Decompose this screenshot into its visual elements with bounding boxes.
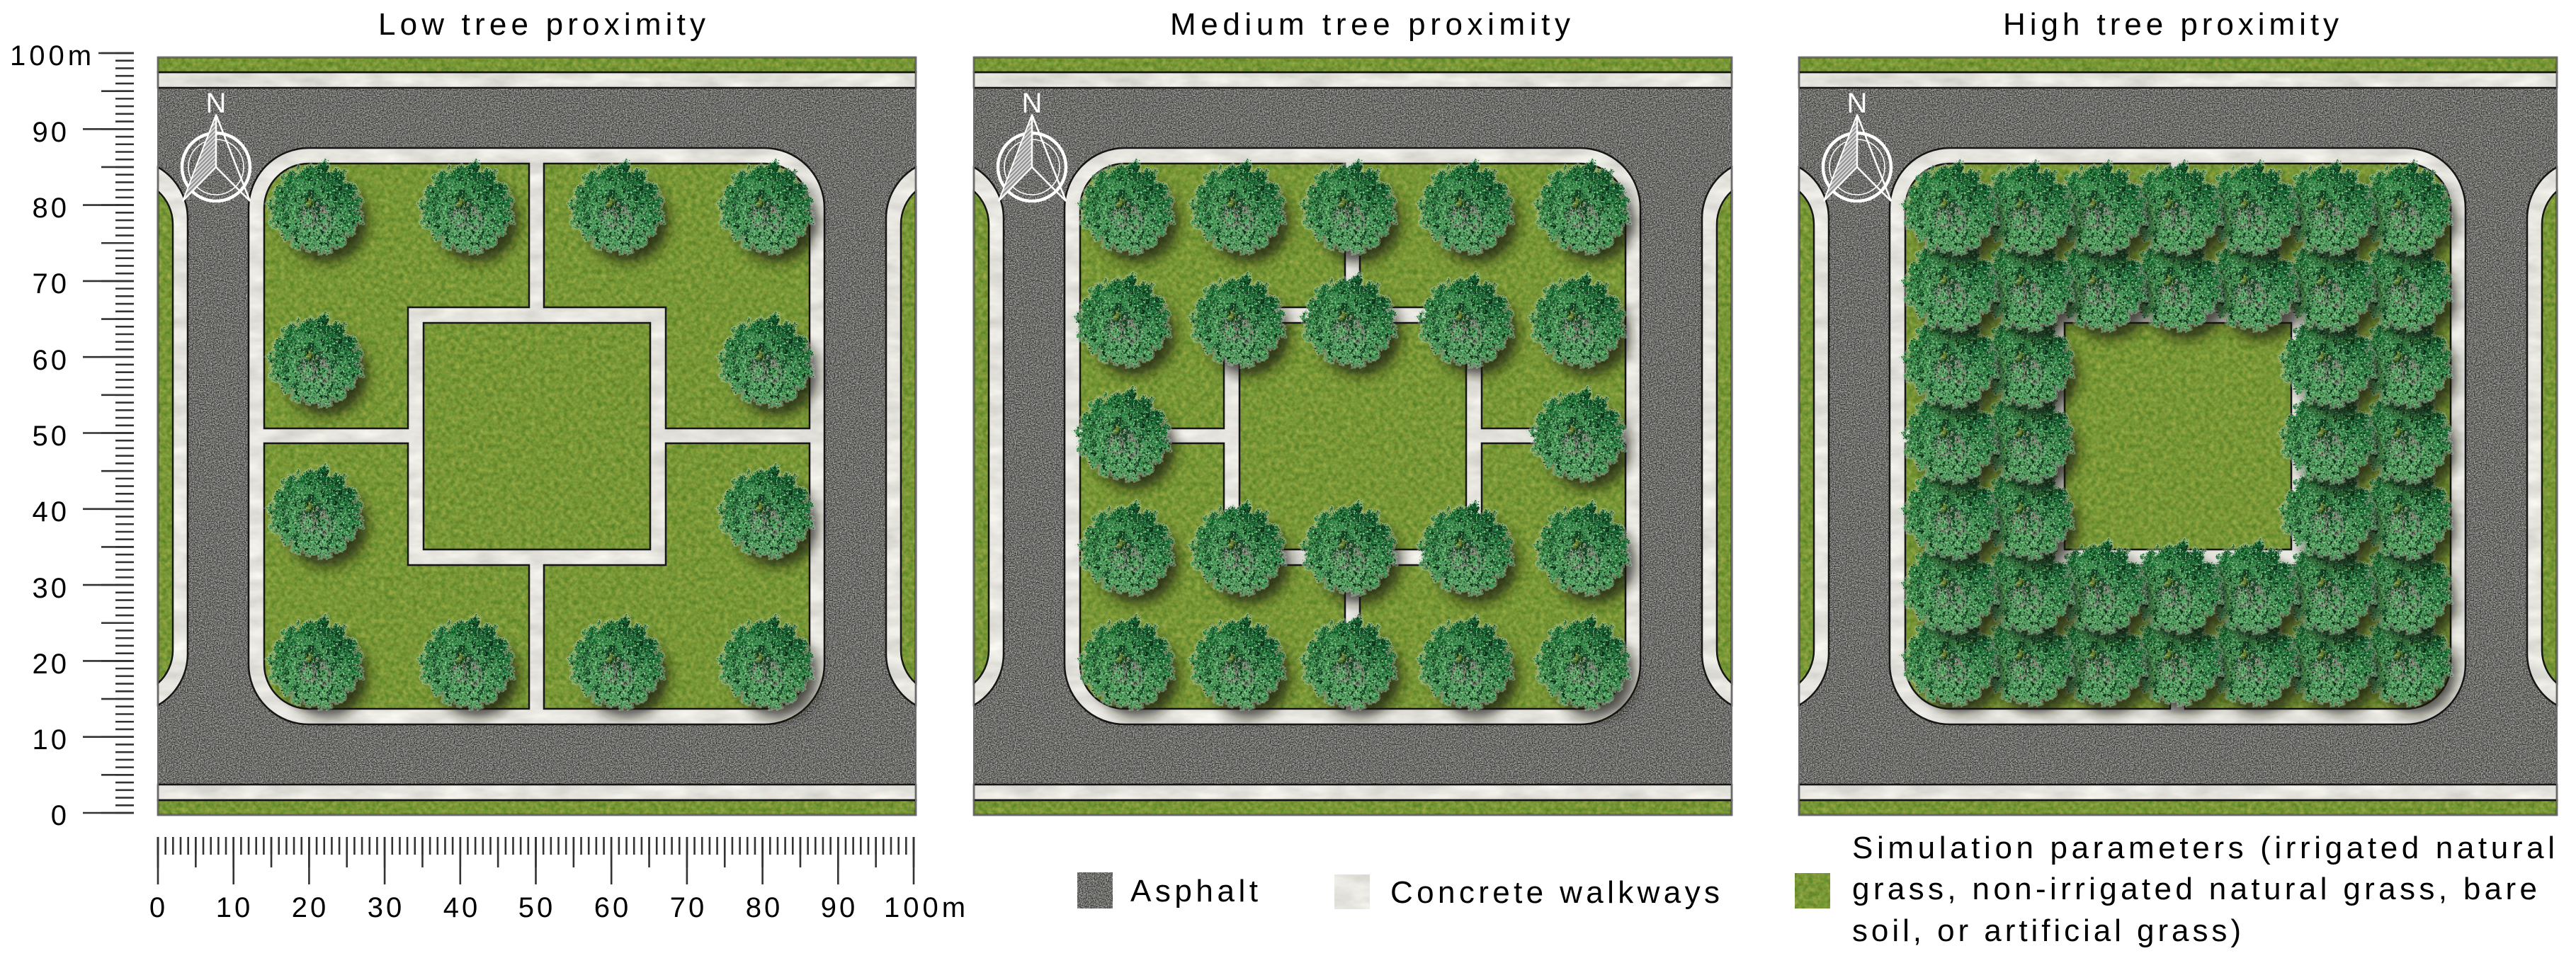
legend item: simulation parameters: soil, or artificial grass) xyxy=(1852,913,2241,948)
legend xyxy=(1077,831,2555,948)
legend item: asphalt xyxy=(1077,872,1258,908)
legend item: asphalt: Asphalt xyxy=(1130,874,1258,908)
horizontal scale ruler in metres: 90 xyxy=(821,892,858,923)
horizontal scale ruler in metres: 70 xyxy=(670,892,707,923)
vertical scale ruler in metres: 20 xyxy=(33,649,69,680)
vertical scale ruler in metres: 30 xyxy=(33,573,69,604)
vertical scale ruler in metres: 60 xyxy=(33,345,69,376)
vertical scale ruler in metres: 10 xyxy=(33,724,69,756)
horizontal scale ruler in metres: 10 xyxy=(216,892,253,923)
vertical scale ruler in metres: 80 xyxy=(33,193,69,224)
trees: high proximity arrangement, 40 trees xyxy=(1905,163,2456,714)
horizontal scale ruler in metres: 20 xyxy=(292,892,329,923)
icon: north arrow xyxy=(1823,88,1891,201)
site layout: asphalt, walkways and grass xyxy=(1799,57,2557,815)
horizontal scale ruler in metres: 40 xyxy=(443,892,480,923)
vertical scale ruler in metres: 100m xyxy=(10,40,95,72)
vertical scale ruler in metres: 0 xyxy=(51,800,69,831)
vertical scale ruler in metres: 90 xyxy=(33,117,69,148)
icon: north arrow xyxy=(182,88,250,201)
icon: north arrow xyxy=(998,88,1066,201)
horizontal scale ruler in metres: 30 xyxy=(368,892,404,923)
trees: low proximity arrangement, 12 trees xyxy=(270,162,818,717)
trees: medium proximity arrangement, 22 trees xyxy=(1077,162,1635,717)
site layout: asphalt, walkways and grass xyxy=(974,57,1732,815)
vertical scale ruler in metres xyxy=(10,40,134,831)
legend item: simulation parameters: Simulation parameters (irrigated natural xyxy=(1852,831,2555,865)
title: high tree proximity: High tree proximity xyxy=(2003,7,2339,42)
vertical scale ruler in metres: 40 xyxy=(33,496,69,528)
panel: medium tree proximity site plan xyxy=(974,57,1732,815)
horizontal scale ruler in metres: 60 xyxy=(594,892,631,923)
panel: low tree proximity site plan xyxy=(158,57,916,815)
vertical scale ruler in metres: 70 xyxy=(33,268,69,300)
site layout: asphalt, walkways and grass xyxy=(158,57,916,815)
legend item: simulation parameters: grass, non-irrigated natural grass, bare xyxy=(1852,872,2537,906)
title: low tree proximity: Low tree proximity xyxy=(378,7,705,42)
horizontal scale ruler in metres: 0 xyxy=(149,892,168,923)
vertical scale ruler in metres: 50 xyxy=(33,421,69,452)
horizontal scale ruler in metres: 80 xyxy=(746,892,783,923)
legend item: simulation parameters xyxy=(1795,831,2555,948)
horizontal scale ruler in metres xyxy=(149,845,969,923)
panel: high tree proximity site plan xyxy=(1799,57,2557,815)
horizontal scale ruler in metres: 100m xyxy=(884,892,969,923)
legend item: concrete walkways: Concrete walkways xyxy=(1390,875,1720,910)
horizontal scale ruler in metres: 50 xyxy=(518,892,555,923)
title: medium tree proximity: Medium tree proximity xyxy=(1170,7,1570,42)
